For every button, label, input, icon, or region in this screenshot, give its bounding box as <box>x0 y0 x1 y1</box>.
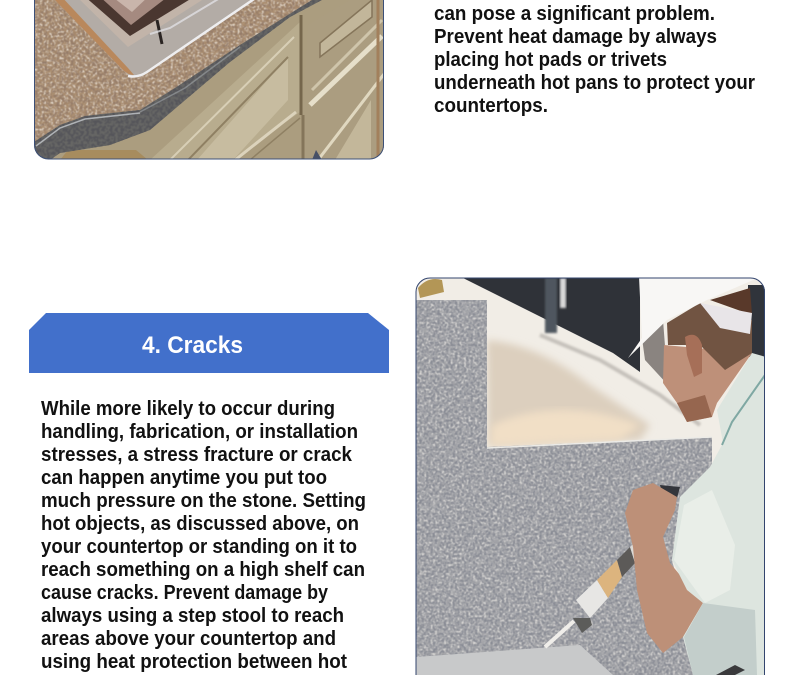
text block: heat damage advice: countertops. <box>434 95 548 117</box>
man: arm and hand <box>625 483 703 653</box>
photo: worker sealing granite with caulk gun <box>416 277 766 675</box>
text block: cracks explanation <box>41 398 366 673</box>
caulk gun <box>545 485 680 647</box>
dark background <box>463 278 766 372</box>
text block: cracks explanation: handling, fabrication, or installation <box>41 421 358 443</box>
heading: 4. Cracks <box>29 313 389 373</box>
text block: cracks explanation: can happen anytime you put too <box>41 467 327 489</box>
text block: cracks explanation: cause cracks. Prevent damage by <box>41 582 329 604</box>
granite slab <box>416 300 716 675</box>
man: white hard hat <box>628 277 760 358</box>
text block: cracks explanation: reach something on a high shelf can <box>41 559 365 581</box>
text block: cracks explanation: While more likely to occur during <box>41 398 335 420</box>
text block: heat damage advice: placing hot pads or trivets <box>434 49 667 71</box>
heading: 4. Cracks: 4. Cracks <box>142 332 243 359</box>
text block: cracks explanation: much pressure on the stone. Setting <box>41 490 366 512</box>
photo frame <box>416 278 764 675</box>
man: shirt <box>672 353 766 675</box>
text block: cracks explanation: using heat protection between hot <box>41 651 347 673</box>
photo frame <box>34 0 384 159</box>
stainless stove <box>50 0 258 77</box>
text block: cracks explanation: your countertop or standing on it to <box>41 536 357 558</box>
blurred marble and beige wall <box>418 279 700 446</box>
text block: cracks explanation: hot objects, as discussed above, on <box>41 513 359 535</box>
text block: heat damage advice: can pose a significant problem. <box>434 3 715 25</box>
text block: heat damage advice: underneath hot pans to protect your <box>434 72 755 94</box>
man: head <box>642 288 752 422</box>
text block: heat damage advice: Prevent heat damage by always <box>434 26 717 48</box>
cabinet doors <box>60 0 384 160</box>
polished granite edge <box>34 0 324 160</box>
granite top surface <box>34 0 324 145</box>
lower slab <box>416 645 613 675</box>
text block: heat damage advice <box>434 3 755 117</box>
text block: cracks explanation: stresses, a stress fracture or crack <box>41 444 353 466</box>
text block: cracks explanation: always using a step stool to reach <box>41 605 344 627</box>
text block: cracks explanation: areas above your countertop and <box>41 628 336 650</box>
photo: granite countertop with gas stove <box>34 0 384 160</box>
